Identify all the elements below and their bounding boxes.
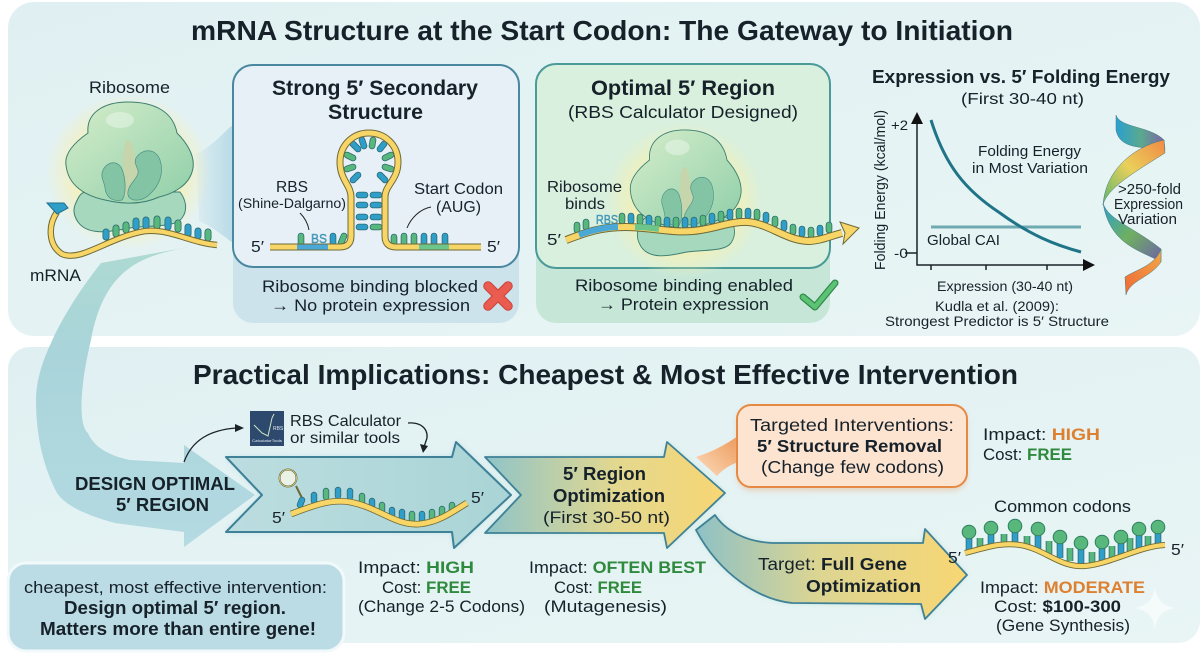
label: fold variation: >250-fold	[1118, 182, 1181, 198]
hairpin backbone	[270, 133, 481, 247]
label: ribosome binds	[547, 179, 622, 213]
citation	[885, 298, 1109, 329]
text: targeted impact and cost	[983, 426, 1100, 464]
axis tick labels: -0	[894, 245, 908, 261]
label: region optimization: (First 30-50 nt)	[543, 509, 670, 527]
label: RBS calculator tools	[290, 413, 402, 447]
heading: strong structure: Structure	[328, 101, 423, 124]
label: design optimal region: DESIGN OPTIMAL	[75, 473, 235, 494]
heading: optimal region: Optimal 5′ Region	[591, 77, 775, 100]
label: 5 prime right: 5′	[1171, 542, 1184, 559]
icon: mRNA arrow tip	[47, 203, 68, 214]
callout: key takeaway	[8, 563, 344, 651]
text: binding blocked: → No protein expression	[271, 296, 470, 315]
callout: targeted interventions: Targeted Interventions:	[750, 415, 954, 435]
callout: key takeaway: Matters more than entire gene!	[40, 619, 316, 639]
text: gene optimization impact and cost: Cost: $100-300	[994, 598, 1121, 616]
chart heading: Expression vs. 5′ Folding Energy	[872, 66, 1171, 87]
subheading: RBS calculator designed: (RBS Calculator Designed)	[568, 102, 798, 122]
label: RBS calculator tools: RBS Calculator	[290, 413, 402, 430]
callout: targeted interventions	[737, 405, 967, 491]
strand nucleotides	[300, 490, 452, 520]
arrow: mRNA strand	[566, 222, 859, 244]
arrow: design to tool	[184, 424, 244, 462]
label: 5 prime right: 5′	[471, 490, 484, 507]
text: binding enabled: Ribosome binding enabled	[575, 276, 793, 295]
label: BS on strand: BS	[311, 231, 327, 246]
text: targeted impact and cost: Impact: HIGH	[983, 426, 1100, 444]
icon: sparkle	[1134, 587, 1176, 629]
arrow: 5 prime design step	[226, 442, 511, 548]
label: region optimization: Optimization	[553, 486, 665, 506]
label: RBS on strand: RBS	[596, 212, 618, 227]
stem loop	[280, 470, 303, 500]
label: 5 prime right: 5′	[487, 239, 500, 256]
panel: optimal 5' region	[536, 64, 859, 323]
text: region step impact and cost: (Mutagenesis)	[544, 598, 667, 616]
chart subheading: (First 30-40 nt)	[961, 91, 1084, 108]
label: RBS: RBS	[276, 179, 308, 196]
text: binding enabled	[575, 276, 793, 314]
panel: top section background	[8, 2, 1200, 336]
label: 5 prime left: 5′	[948, 550, 961, 567]
axis tick labels	[891, 117, 908, 261]
text: gene optimization impact and cost	[980, 579, 1145, 635]
label: target full gene	[758, 554, 921, 596]
text: design step impact and cost: Cost: FREE	[382, 579, 471, 597]
text: region step impact and cost	[529, 559, 706, 616]
label: folding energy: in Most Variation	[972, 160, 1088, 177]
text: design step impact and cost	[358, 559, 525, 616]
icon: variation ribbon	[1103, 115, 1183, 295]
arrow: large swoosh from ribosome to design step	[36, 247, 255, 547]
label: ribosome binds: Ribosome	[547, 179, 622, 196]
text: design step impact and cost: (Change 2-5 Codons)	[358, 598, 525, 616]
icon: green check	[803, 283, 835, 307]
label: fold variation: Expression	[1114, 197, 1183, 213]
arrow: 5 prime region optimization	[485, 442, 725, 548]
text: binding blocked: Ribosome binding blocked	[262, 277, 478, 296]
label: mRNA: mRNA	[30, 267, 81, 285]
connector: to targeted interventions	[696, 436, 738, 476]
heading: strong structure: Strong 5′ Secondary	[272, 77, 478, 100]
panel: bottom section background	[8, 347, 1200, 643]
label: fold variation: Variation	[1118, 212, 1177, 228]
heading: practical implications: Practical Implications: Cheapest & Most Effective Intervention	[193, 359, 1018, 390]
label: ribosome: Ribosome	[89, 79, 170, 97]
mRNA nucleotides	[106, 219, 208, 238]
title: mRNA Structure at the Start Codon: The Gateway to Initiation	[191, 15, 1013, 46]
icon: ribosome with mRNA	[46, 94, 217, 256]
pointers to RBS and start codon	[300, 207, 431, 230]
axis tick labels: +2	[891, 117, 908, 133]
panel: strong 5' secondary structure	[233, 65, 519, 323]
text: gene optimization impact and cost: (Gene Synthesis)	[996, 617, 1130, 635]
icon: RBS calculator logo: RBS	[273, 426, 284, 432]
label: AUG: (AUG)	[436, 199, 481, 216]
icon: RBS calculator logo	[250, 411, 284, 446]
icon: red cross	[488, 286, 508, 306]
arrow: full gene optimization	[696, 515, 967, 619]
label: global CAI: Global CAI	[927, 232, 1000, 249]
line: global CAI	[931, 226, 1081, 228]
text: binding blocked	[262, 277, 478, 315]
icon: codon strand	[962, 519, 1165, 566]
chart: expression vs folding energy	[872, 66, 1171, 329]
callout: key takeaway: cheapest, most effective intervention:	[24, 579, 327, 597]
icon: RBS calculator logo: CalculatorTools	[252, 438, 282, 443]
text: region step impact and cost: Impact: OFTEN BEST	[529, 559, 706, 577]
connector: backdrop from ribosome to blocked panel	[196, 125, 233, 243]
label: folding energy: Folding Energy	[978, 143, 1081, 160]
label: fold variation	[1114, 182, 1183, 228]
text: targeted impact and cost: Cost: FREE	[983, 446, 1072, 464]
callout: targeted interventions: 5′ Structure Removal	[757, 436, 942, 456]
line: folding energy curve	[931, 120, 1081, 252]
label: target full gene: Target: Full Gene	[758, 554, 907, 574]
label: region optimization: 5′ Region	[563, 464, 646, 484]
heading: strong structure	[272, 77, 478, 124]
strand nucleotides	[577, 211, 829, 235]
label: folding energy	[972, 143, 1088, 177]
callout: targeted interventions: (Change few codons)	[761, 457, 944, 477]
label: design optimal region	[75, 473, 235, 515]
label: design optimal region: 5′ REGION	[116, 494, 209, 515]
label: common codons: Common codons	[994, 498, 1131, 516]
label: region optimization	[543, 464, 670, 527]
label: 5 prime left: 5′	[251, 239, 264, 256]
arrow: tool to region	[408, 423, 428, 453]
mRNA strand	[51, 212, 217, 256]
label: target full gene: Optimization	[806, 576, 921, 596]
axes	[905, 112, 1095, 271]
text: gene optimization impact and cost: Impact: MODERATE	[980, 579, 1145, 597]
strand backbone	[291, 501, 467, 524]
label: 5 prime left: 5′	[272, 510, 285, 527]
label: 5 prime: 5′	[547, 232, 561, 249]
citation: Kudla et al. (2009):	[935, 298, 1059, 314]
label: ribosome binds: binds	[565, 196, 605, 213]
label: Shine-Dalgarno: (Shine-Dalgarno)	[238, 196, 346, 211]
x axis label: Expression (30-40 nt)	[937, 278, 1073, 294]
label: RBS calculator tools: or similar tools	[290, 430, 400, 447]
text: binding enabled: → Protein expression	[598, 295, 769, 314]
citation: Strongest Predictor is 5′ Structure	[885, 313, 1109, 329]
icon: ribosome bound	[606, 123, 763, 278]
label: start codon: Start Codon	[414, 181, 503, 198]
text: design step impact and cost: Impact: HIGH	[358, 559, 474, 577]
hairpin nucleotides	[301, 140, 445, 243]
text: region step impact and cost: Cost: FREE	[554, 579, 642, 597]
callout: key takeaway: Design optimal 5′ region.	[64, 598, 286, 618]
y axis label: Folding Energy (kcal/mol)	[873, 110, 889, 270]
